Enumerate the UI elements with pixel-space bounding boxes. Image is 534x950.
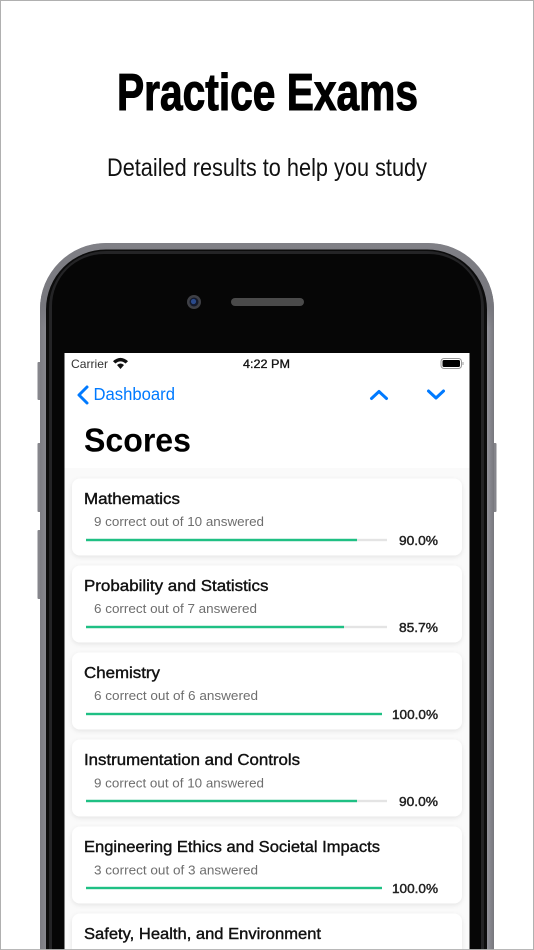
heading: Scores: Scores <box>84 422 191 458</box>
subtitle: Detailed results to help you study <box>107 154 427 182</box>
card: Mathematics <box>72 478 462 556</box>
phone mockup <box>38 243 496 950</box>
icon: chevron down <box>428 391 444 398</box>
card: Engineering Ethics and Societal Impacts: 3 correct out of 3 answered <box>94 862 258 878</box>
card: Safety, Health, and Environment: Safety, Health, and Environment <box>84 926 322 943</box>
card: Instrumentation and Controls <box>72 740 462 816</box>
card: Engineering Ethics and Societal Impacts: Engineering Ethics and Societal Impacts <box>84 839 380 856</box>
card: Engineering Ethics and Societal Impacts <box>72 826 462 904</box>
card: Chemistry: Chemistry <box>84 665 160 682</box>
status bar: battery <box>441 358 464 368</box>
card: Safety, Health, and Environment <box>72 914 462 950</box>
speaker <box>231 298 304 306</box>
card: Mathematics: Mathematics <box>84 491 180 508</box>
card: Chemistry <box>72 652 462 730</box>
card: Chemistry: 6 correct out of 6 answered <box>94 688 258 703</box>
screen <box>64 353 470 950</box>
card: Probability and Statistics: 85.7% <box>399 620 438 635</box>
back button: Dashboard: Dashboard <box>94 384 175 404</box>
camera <box>187 295 201 309</box>
card: Mathematics: 9 correct out of 10 answered <box>94 514 264 529</box>
phone body <box>40 243 494 950</box>
card: Instrumentation and Controls: 90.0% <box>399 794 438 809</box>
card: Probability and Statistics <box>72 566 462 642</box>
card: Instrumentation and Controls: Instrumentation and Controls <box>84 752 300 769</box>
side buttons <box>38 362 496 599</box>
icon: chevron up <box>372 392 386 398</box>
card: Instrumentation and Controls: 9 correct out of 10 answered <box>94 776 264 790</box>
status bar: carrier <box>71 357 128 371</box>
card: Probability and Statistics: Probability and Statistics <box>84 578 268 595</box>
card: Mathematics: 90.0% <box>399 533 438 548</box>
card: Chemistry: 100.0% <box>392 707 438 722</box>
card: Probability and Statistics: 6 correct out of 7 answered <box>94 601 257 616</box>
title: Practice Exams <box>117 64 418 122</box>
card: Engineering Ethics and Societal Impacts: 100.0% <box>392 881 438 896</box>
status bar: time: 4:22 PM <box>243 357 290 371</box>
status bar: carrier: Carrier <box>71 357 108 371</box>
